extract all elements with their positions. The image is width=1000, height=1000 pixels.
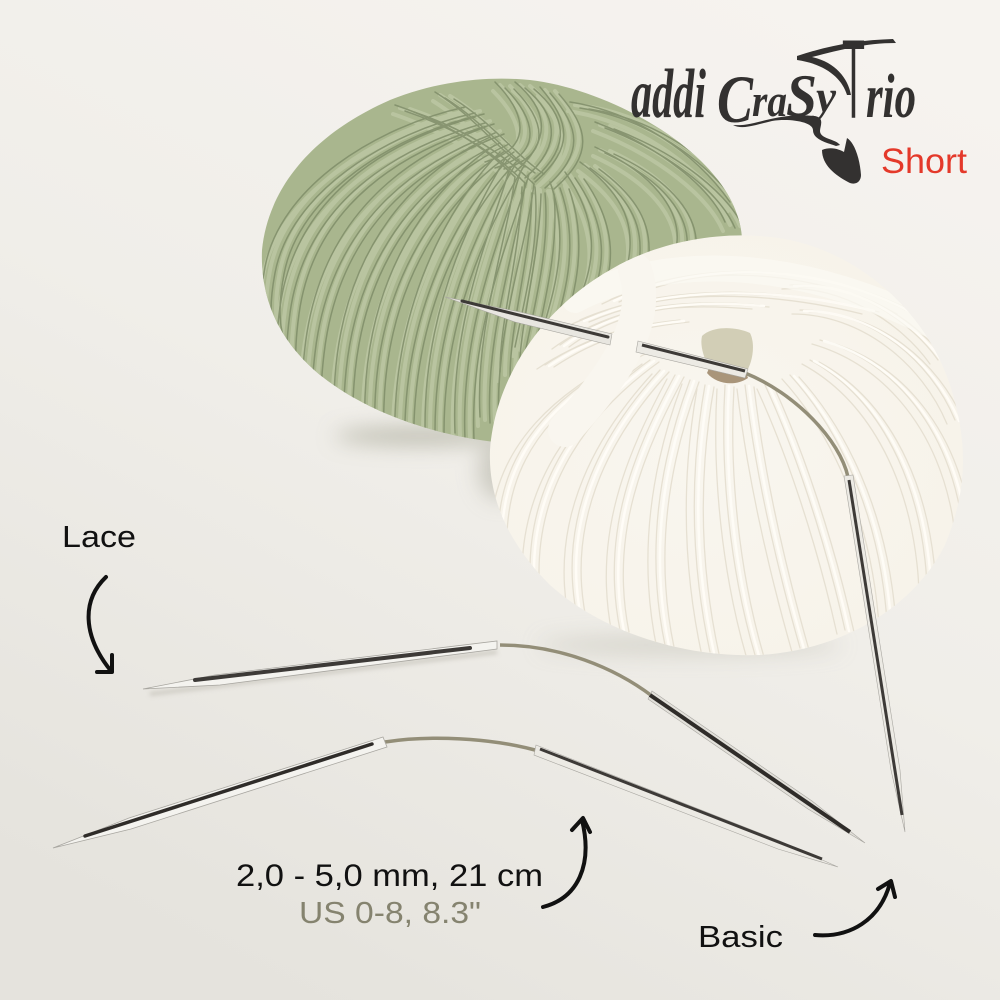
logo: addi CraSyTrio: C	[717, 61, 754, 137]
basic needle	[53, 737, 838, 867]
logo: addi CraSyTrio: ra	[752, 75, 787, 126]
label: US size range: US 0-8, 8.3"	[299, 895, 481, 930]
shadows under yarn balls	[335, 427, 840, 655]
lace needle	[143, 641, 865, 843]
yarn core opening	[701, 328, 753, 372]
logo: addi CraSyTrio: T	[842, 17, 865, 142]
label: Lace: Lace	[62, 519, 136, 554]
green yarn ball	[262, 78, 742, 442]
label: Short: Short	[881, 142, 967, 181]
logo: addi CraSyTrio: y	[811, 71, 837, 122]
arrow: size to needle	[543, 818, 590, 907]
logo: addi CraSyTrio: S	[786, 63, 817, 129]
arrow: Lace to needle	[89, 577, 112, 672]
white yarn ball	[490, 235, 972, 664]
needle through white yarn	[445, 297, 905, 832]
label: Basic: Basic	[698, 919, 783, 954]
logo: addi CraSyTrio: rio	[866, 63, 916, 131]
strand over needle	[565, 270, 639, 430]
label: size range: 2,0 - 5,0 mm, 21 cm	[236, 857, 543, 893]
top band of yarn	[563, 270, 926, 336]
arrow: Basic to needle	[815, 881, 895, 935]
logo: addi CraSyTrio: addi	[631, 56, 706, 133]
logo swash and leaf	[797, 39, 896, 95]
logo: addi CraSyTrio	[631, 17, 916, 184]
